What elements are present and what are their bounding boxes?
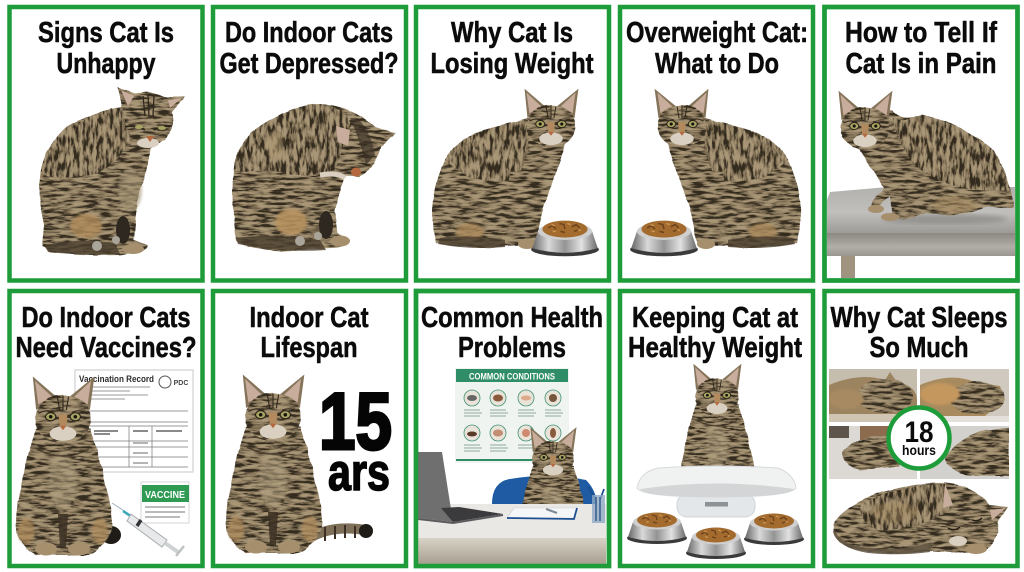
heading: do indoor cats get depressed	[220, 17, 398, 80]
heading: do indoor cats need vaccines: Need Vaccines?	[16, 332, 196, 364]
panel: do indoor cats get depressed	[213, 7, 406, 280]
heading: common health problems	[421, 302, 603, 364]
desk	[418, 504, 606, 564]
heading: why cat sleeps so much: So Much	[870, 332, 968, 364]
vaccination record card: Vaccination Record	[79, 374, 154, 385]
cat: crouched on table	[839, 91, 1014, 224]
cat: head bowed	[232, 104, 396, 251]
heading: signs cat is unhappy	[38, 17, 174, 80]
heading: indoor cat lifespan: Indoor Cat	[250, 302, 369, 334]
heading: do indoor cats get depressed: Do Indoor Cats	[225, 17, 393, 49]
heading: keeping cat at healthy weight: Healthy Weight	[628, 332, 802, 364]
cat: behind desk	[518, 427, 589, 561]
big number 15: 15	[319, 377, 392, 467]
pen cup	[588, 487, 605, 523]
food bowl	[630, 221, 698, 256]
cat: seated beside bowl	[432, 89, 578, 249]
vaccination record card: PDC	[174, 380, 188, 387]
heading: why cat sleeps so much	[830, 302, 1008, 364]
heading: keeping cat at healthy weight: Keeping Cat at	[632, 302, 798, 334]
heading: why cat is losing weight: Losing Weight	[430, 48, 594, 80]
cat: hunched looking down	[39, 87, 185, 255]
heading: keeping cat at healthy weight	[628, 302, 802, 364]
cat: seated front facing	[226, 374, 321, 554]
badge: 18 hours: 18	[904, 416, 934, 449]
heading: common health problems: Common Health	[421, 302, 603, 334]
panel: do indoor cats need vaccines	[10, 291, 202, 566]
vaccine label card: VACCINE	[145, 489, 185, 501]
heading: why cat is losing weight	[430, 17, 594, 80]
heading: signs cat is unhappy: Unhappy	[56, 48, 156, 80]
laptop	[418, 452, 503, 524]
heading: indoor cat lifespan: Lifespan	[260, 332, 358, 364]
vaccine label card	[141, 482, 189, 523]
panel: overweight cat what to do	[620, 7, 813, 280]
heading: how to tell if cat is in pain	[845, 17, 997, 80]
panel: common health problems	[416, 291, 609, 566]
heading: how to tell if cat is in pain: How to Tell If	[845, 17, 997, 49]
heading: how to tell if cat is in pain: Cat Is in Pain	[846, 48, 996, 80]
photo: sleeping cat 1	[828, 369, 917, 422]
panel: why cat sleeps so much	[824, 291, 1018, 566]
heading: overweight cat what to do: Overweight Cat:	[626, 17, 808, 49]
heading: indoor cat lifespan	[250, 302, 369, 364]
heading: signs cat is unhappy: Signs Cat Is	[38, 17, 174, 49]
panel: indoor cat lifespan	[213, 291, 406, 566]
heading: do indoor cats need vaccines: Do Indoor Cats	[22, 302, 190, 334]
heading: common health problems: Problems	[458, 332, 566, 364]
panel: how to tell if cat is in pain	[824, 7, 1018, 280]
badge: 18 hours	[888, 408, 950, 468]
heading: do indoor cats get depressed: Get Depressed?	[220, 48, 398, 80]
heading: overweight cat what to do	[626, 17, 808, 80]
cat: curled up asleep	[833, 483, 1008, 554]
food bowl	[531, 221, 599, 256]
clipboard and pen	[507, 508, 577, 519]
heading: why cat is losing weight: Why Cat Is	[451, 17, 573, 49]
pet scale	[637, 466, 796, 517]
panel: keeping cat at healthy weight	[620, 291, 813, 566]
poster: common conditions	[455, 368, 569, 463]
food bowl center	[686, 528, 746, 559]
panel: why cat is losing weight	[416, 7, 609, 280]
poster: common conditions: COMMON CONDITIONS	[469, 372, 555, 382]
food bowl right	[744, 514, 804, 545]
blue office chair	[492, 476, 597, 504]
badge: 18 hours: hours	[902, 443, 936, 458]
exam table	[827, 187, 1015, 278]
cat tail	[313, 524, 373, 541]
cat: seated beside bowl mirrored	[655, 89, 800, 249]
photo: sleeping cat 2	[920, 369, 1009, 422]
food bowl left	[627, 512, 687, 544]
text: ars: ars	[328, 444, 390, 502]
panel: signs cat is unhappy	[10, 7, 202, 280]
cat: seated front facing	[16, 376, 121, 556]
syringe	[112, 503, 184, 556]
photo: sleeping cat 3	[829, 426, 917, 479]
photo: sleeping cat 4	[920, 426, 1009, 479]
heading: do indoor cats need vaccines	[16, 302, 196, 364]
cat: on scale	[681, 364, 755, 466]
heading: overweight cat what to do: What to Do	[655, 48, 779, 80]
vaccination record card	[75, 370, 193, 472]
